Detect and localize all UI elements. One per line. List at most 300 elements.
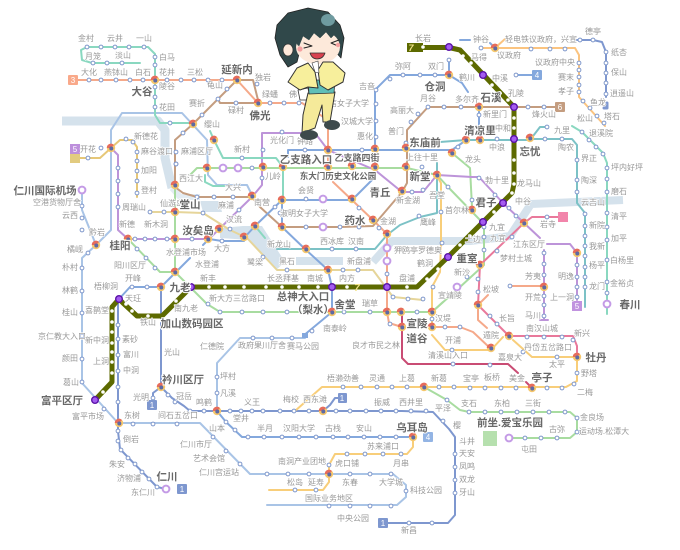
station labels: regular: 斗井 <box>459 436 475 446</box>
station labels: regular: 燕钵山 <box>104 67 128 77</box>
station labels: regular: 孝子 <box>558 87 574 96</box>
station labels: regular: 大兴 <box>225 182 241 192</box>
station labels: regular: 梧濑劲善 <box>327 373 359 383</box>
station labels: regular: 松岛 <box>287 477 303 487</box>
station labels: regular: 倒岩 <box>123 434 139 444</box>
light blue lines <box>82 113 406 505</box>
white hand <box>298 88 310 100</box>
station labels: regular: 磨石 <box>611 186 627 196</box>
station labels: regular: 议政府中央 <box>535 57 575 67</box>
station labels: regular: 开浦 <box>445 335 461 345</box>
station labels: regular: 屯田 <box>521 444 537 454</box>
station labels: regular: 新丰 <box>200 273 216 283</box>
station labels: regular: 光明 <box>133 392 149 402</box>
station labels: regular: 南营 <box>254 197 270 207</box>
station labels: regular: 汉南 <box>348 236 364 246</box>
station labels: regular: 中溪 <box>492 73 508 83</box>
station labels: regular: 龙门 <box>589 281 605 291</box>
station labels: regular: 长丞拜基 <box>267 273 299 283</box>
station labels: major stations: 君子 <box>476 197 497 209</box>
station labels: regular: 桂山 <box>62 307 78 317</box>
station labels: regular: 空港货物厅舍 <box>33 197 81 207</box>
station labels: regular: 宣靖陵 <box>438 290 462 300</box>
station labels: regular: 麻谷渡口 <box>141 146 173 156</box>
station labels: major stations: （梨水） <box>292 303 334 316</box>
station labels: regular: 喜鹊堂 <box>85 305 109 315</box>
river <box>62 121 623 270</box>
line 5: lilac <box>111 133 577 320</box>
station labels: regular: 古栈 <box>325 423 341 433</box>
station labels: regular: 新大方三岔路口 <box>209 293 265 303</box>
station labels: regular: 花田 <box>159 102 175 112</box>
station labels: regular: 白石 <box>135 67 151 77</box>
station labels: regular: 大化 <box>81 67 97 77</box>
station labels: regular: 长旨 <box>499 313 515 323</box>
station labels: regular: 野塔 <box>581 368 597 378</box>
station labels: regular: 新德花 <box>134 131 158 141</box>
station labels: regular: 东柏 <box>494 398 510 408</box>
station labels: regular: 凤鸣 <box>459 461 475 471</box>
station labels: regular: 清溪山入口 <box>428 350 468 360</box>
station labels: regular: 中洞 <box>123 365 139 375</box>
station labels: regular: 鹭梁 <box>247 257 263 267</box>
station labels: major stations: 东大门历史文化公园 <box>300 171 376 181</box>
legs <box>300 92 340 140</box>
station labels: major stations <box>14 63 640 483</box>
station labels: major stations: 忘忧 <box>520 145 541 158</box>
station labels: major stations: 延新内 <box>221 63 253 76</box>
station labels: regular: 淑明女子大学 <box>280 208 328 218</box>
station labels: major stations: 亭子 <box>532 371 553 384</box>
teal robe <box>308 80 335 94</box>
station labels: regular: 花井 <box>159 67 175 77</box>
station labels: regular: 济物浦 <box>117 473 141 483</box>
station labels: major stations: 宣陵 <box>406 317 428 330</box>
station labels: regular: 南洞产业团地 <box>278 456 326 466</box>
station labels: regular: 普门 <box>388 126 404 136</box>
station labels: regular: 堂井 <box>233 413 249 423</box>
line boxes: 7 <box>354 283 360 294</box>
station labels: regular: 南城 <box>307 273 323 283</box>
yellow lines <box>80 39 605 490</box>
station labels: regular: 儿岭 <box>265 171 281 181</box>
station labels: regular: 松山 <box>577 113 593 123</box>
line boxes: 4 <box>426 433 431 442</box>
station labels: major stations: 石溪 <box>480 91 502 104</box>
station labels: regular: 西东滩 <box>303 394 327 404</box>
station labels: regular: 新中洞 <box>85 335 109 345</box>
station labels: regular: 德亭 <box>585 26 601 36</box>
station labels: regular: 樱 <box>453 420 461 430</box>
station labels: regular: 水登浦 <box>195 259 219 269</box>
station labels: regular: 京仁教大入口 <box>38 331 86 341</box>
station labels: regular: 首尔林 <box>445 205 469 215</box>
station labels: major stations: 乙支路四街 <box>334 152 380 163</box>
line boxes <box>68 43 582 528</box>
station labels: regular: 麻浦区厅 <box>181 146 213 156</box>
station labels: regular: 宝亭 <box>463 373 479 383</box>
station labels: regular: 平泽 <box>435 404 451 413</box>
station labels: major stations: 药水 <box>344 214 366 227</box>
station labels: regular: 东春 <box>342 477 358 487</box>
station labels: regular: 吾堂 <box>429 190 445 200</box>
station labels: regular: 半月 <box>257 423 273 433</box>
station labels: regular: 丹岱五岔路口 <box>524 342 572 352</box>
station labels: regular: 仁川宫运站 <box>199 467 239 477</box>
line boxes: 5 <box>73 145 78 154</box>
station labels: regular: 登村 <box>141 185 157 195</box>
station labels: regular: 义王 <box>244 398 260 407</box>
station labels: regular: 大方 <box>214 243 230 253</box>
station labels: major stations: 总神大入口 <box>277 290 329 303</box>
station labels: regular: 鹤川 <box>459 72 475 82</box>
station labels: regular: 内方 <box>339 273 355 283</box>
station labels: major stations: 加山数码园区 <box>160 317 224 330</box>
station labels: major stations: 堂山 <box>180 198 200 211</box>
station labels: regular: 铁山 <box>140 317 156 327</box>
station labels: regular: 葛山 <box>63 377 79 387</box>
station labels: regular: 苏来浦口 <box>367 441 399 451</box>
station labels: major stations: 桂阳 <box>110 239 130 252</box>
station labels: major stations: 富平区厅 <box>41 394 83 407</box>
station labels: regular: 仁德院 <box>200 341 224 351</box>
station labels: regular: 坪内好坪 <box>611 162 643 172</box>
station labels: regular: 加平 <box>611 233 627 243</box>
station labels: regular: 仁川市厅 <box>180 439 212 449</box>
station labels: regular: 鹤洞 <box>417 258 433 268</box>
station labels: regular: 保山 <box>611 67 627 77</box>
line boxes: 1 <box>150 401 155 410</box>
station labels: regular: 东树 <box>124 410 140 420</box>
line 6: brown <box>175 80 560 227</box>
station labels: regular: 冠岳 <box>176 391 192 401</box>
fringe <box>295 24 342 46</box>
station labels: major stations: 衿川区厅 <box>162 373 204 386</box>
mint and teal lines <box>81 47 607 314</box>
station labels: regular: 富平市场 <box>72 411 104 421</box>
station labels: regular: 陶农 <box>558 142 574 152</box>
station labels: regular: 梧柳洞 <box>94 281 118 291</box>
line boxes: 1 <box>180 485 185 494</box>
station labels: regular: 西井里 <box>399 397 423 407</box>
station labels: regular: 中浪 <box>489 142 505 152</box>
station labels: regular: 淡山 <box>115 50 131 60</box>
station labels: regular: 议政府 <box>497 50 521 60</box>
station labels: regular: 振威 <box>374 397 390 407</box>
station labels: regular: 退溪院 <box>589 128 613 138</box>
station labels: major stations: 佛光 <box>250 109 271 122</box>
station labels: major stations: 前坐.爱宝乐园 <box>477 416 543 429</box>
station labels: regular: 鱼龙 <box>590 97 606 107</box>
station labels: regular: 上往十里 <box>406 152 438 162</box>
line 7: olive <box>95 48 514 400</box>
station labels: regular: 虎口铺 <box>335 458 359 468</box>
line 2: green <box>128 153 577 438</box>
station labels: regular: 美金 <box>509 373 525 383</box>
line boxes: 1 <box>340 394 345 403</box>
station labels: regular: 光化门 <box>270 135 294 145</box>
station labels: regular: 汉城大学 <box>341 116 373 126</box>
station labels: regular: 三松 <box>187 67 203 77</box>
station labels: regular: 多尔齐 <box>455 94 479 104</box>
transfer stations <box>92 44 581 478</box>
station labels: regular: 鹰峰 <box>420 217 436 227</box>
station labels: regular: 艺术会馆 <box>193 453 225 463</box>
station labels: regular: 烽火山 <box>532 109 556 119</box>
station labels: regular: 素砂 <box>122 334 138 344</box>
pink and crimson lines <box>402 217 577 388</box>
line boxes: 3 <box>71 76 76 85</box>
station labels: regular: 逍遥山 <box>610 88 634 98</box>
station labels: major stations: 仓洞 <box>424 80 446 93</box>
station labels: regular: 支石 <box>461 398 477 408</box>
line 3: orange <box>73 80 544 348</box>
station labels: regular: 杨平 <box>589 260 605 270</box>
station labels: regular: 金裕贞 <box>610 278 634 288</box>
station labels: regular: 汉流 <box>226 214 242 224</box>
station labels: regular: 赛末 <box>558 72 574 82</box>
station labels: regular: 鸣鹤 <box>196 397 212 407</box>
stations <box>80 38 609 525</box>
station labels: regular: 汉阳大学 <box>283 423 315 433</box>
station labels: regular: 仙游岛 <box>160 198 184 208</box>
station labels: regular: 岩寺 <box>540 219 556 229</box>
station labels: regular: 一山 <box>136 33 152 43</box>
station labels: regular: 上洞 <box>93 356 109 366</box>
line boxes: 5 <box>575 302 580 311</box>
station labels: regular: 新木洞 <box>144 219 168 229</box>
station labels: major stations: 道谷 <box>406 332 428 345</box>
station labels: regular: 佛 <box>289 89 297 99</box>
station labels: regular: 东仁川 <box>131 487 155 497</box>
station labels: regular: 开荒 <box>525 292 541 302</box>
station labels: regular: 惠化 <box>357 131 373 141</box>
station labels: regular: 赛折 <box>189 98 205 108</box>
station labels: regular: 橘岘 <box>67 244 83 254</box>
station labels: regular: 九宜 <box>489 222 505 232</box>
station labels: regular: 月串 <box>393 459 409 468</box>
station labels: regular: 吉音 <box>359 81 375 91</box>
station labels: major stations: 乙支路入口 <box>280 153 332 166</box>
station labels: regular: 黑石 <box>279 257 295 266</box>
station labels: regular: 古弥 <box>549 424 565 434</box>
station labels: regular: 太平 <box>549 359 565 369</box>
station labels: regular: 盘浦 <box>399 273 415 283</box>
station labels: major stations: 青丘 <box>370 186 391 199</box>
station labels: regular: 土边 <box>465 234 481 244</box>
station labels: regular: 光山 <box>164 347 180 357</box>
station labels: regular: 双门 <box>428 61 444 71</box>
station labels: regular: 弥阿 <box>395 61 411 71</box>
station labels: regular: 龟山 <box>207 80 223 90</box>
station labels: regular: 新院 <box>589 220 605 230</box>
station labels: regular: 朴村 <box>62 262 78 272</box>
station labels: regular: 马川 <box>525 311 541 320</box>
station labels: regular: 芳夷 <box>525 271 541 281</box>
station labels: regular: 新德 <box>119 219 135 229</box>
station labels: regular: 双龙 <box>459 474 475 484</box>
station labels: major stations: 新堂 <box>410 170 430 183</box>
station labels: regular: 山本 <box>209 423 225 433</box>
station labels: regular: 明逸 <box>558 271 574 281</box>
station labels: regular: 朱安 <box>109 459 125 469</box>
station labels: regular: 国际业务地区 <box>305 493 353 503</box>
station labels: regular: 上一洞 <box>550 292 574 302</box>
station labels: regular: 云西 <box>62 211 78 220</box>
station labels: regular: 塔石 <box>604 111 620 121</box>
station labels: regular: 上葛 <box>399 373 415 383</box>
station labels: regular: 新村 <box>234 144 250 154</box>
station labels: major stations: 东庙前 <box>409 136 441 149</box>
station labels: regular: 良才市民之林 <box>352 340 400 350</box>
station labels: regular: 孔陵 <box>508 89 524 98</box>
station labels: regular: 轻电铁议政府，兴宣 <box>505 34 577 44</box>
station labels: regular: 坪村 <box>220 371 236 381</box>
station labels: regular: 周瑞山 <box>122 202 146 212</box>
station labels: regular: 林鹤 <box>62 285 78 295</box>
station labels: regular: 松坡 <box>483 284 499 294</box>
station labels: regular: 龙马山 <box>517 178 541 188</box>
station labels: regular: 新龙山 <box>267 239 291 249</box>
station labels: regular: 月笼 <box>85 51 101 61</box>
station labels: regular: 二梅 <box>577 387 593 397</box>
station labels: regular: 钟路 <box>297 136 313 146</box>
station labels: regular: 天安 <box>459 448 475 458</box>
line boxes: 7 <box>408 43 414 53</box>
line 7 station dots <box>101 45 516 394</box>
station labels: regular: 云吉山 <box>581 197 605 207</box>
hair back <box>275 8 344 67</box>
station labels: regular: 江东区厅 <box>513 239 545 249</box>
line boxes: 4 <box>535 71 540 80</box>
station labels: regular: 西冰库 <box>320 236 344 246</box>
station labels: regular: 独岩 <box>255 72 271 82</box>
station labels: major stations: 春川 <box>620 298 640 311</box>
station labels: regular: 黔岩 <box>89 227 105 237</box>
station labels: regular: 凡溪 <box>220 388 236 398</box>
station labels: regular: 会贤 <box>298 185 314 195</box>
station labels: regular: 缨山 <box>204 119 220 129</box>
station labels: regular: 高丽大 <box>390 105 414 115</box>
station labels: regular: 新盘浦 <box>347 256 371 266</box>
station labels: regular: 新葛 <box>431 373 447 383</box>
station labels: regular: 大学城 <box>379 477 403 487</box>
station labels: regular: 九里 <box>554 126 570 135</box>
station labels: regular: 颜田 <box>62 353 78 363</box>
station labels: regular: 九宜 <box>490 233 506 243</box>
station labels: regular: 纸杏 <box>611 47 627 57</box>
station labels: regular: 新兴 <box>574 328 590 338</box>
station labels: regular: 板桥 <box>484 372 500 382</box>
jacket sleeves <box>288 61 345 90</box>
line 1: main south-west branch <box>118 40 607 523</box>
station labels: regular: 金良场 <box>580 412 604 422</box>
station labels: regular: 狎鸥亭罗德奥 <box>394 245 442 255</box>
line boxes: 1 <box>381 519 386 528</box>
station labels: major stations: 舍堂 <box>334 298 356 311</box>
station labels: regular: 诚信女子大学 <box>321 98 369 108</box>
station labels: regular: 西江大 <box>179 173 203 183</box>
station labels: regular: 云井 <box>107 33 123 43</box>
face <box>296 30 340 64</box>
station labels: regular: 梦村土城 <box>500 253 532 263</box>
station labels: regular: 麻浦 <box>218 200 234 210</box>
station labels: regular: 水登浦市场 <box>166 247 206 257</box>
lilac ring stations <box>79 165 610 492</box>
station labels: regular: 安山 <box>356 423 372 433</box>
station labels: regular: 新金湖 <box>396 195 420 205</box>
station labels: regular: 中央公园 <box>337 513 369 523</box>
station labels: regular: 阳川区厅 <box>114 261 146 270</box>
station labels: regular: 龙头 <box>465 154 481 164</box>
station labels: regular: 陵谷 <box>159 82 175 91</box>
character: cartoon boy in yellow hanbok <box>275 8 345 140</box>
station labels: regular: 陶深 <box>581 175 597 185</box>
station labels: regular: 富川 <box>123 349 139 359</box>
station labels: major stations: 汝矣岛 <box>182 224 214 237</box>
station labels: major stations: 清凉里 <box>464 124 496 137</box>
station labels: major stations: 仁川 <box>156 470 178 483</box>
station labels: major stations: 重室 <box>456 252 478 265</box>
station labels: regular: 三街 <box>525 398 541 408</box>
station labels: regular: 新沙 <box>454 267 470 277</box>
line 4: blue <box>119 40 537 437</box>
station labels: regular: 绿蟠 <box>262 89 278 99</box>
station labels: regular: 白杨里 <box>610 255 634 265</box>
station labels: regular: 梅校 <box>283 394 299 404</box>
station labels: regular: 清平 <box>611 211 627 221</box>
station labels: major stations: 乌耳岛 <box>396 421 428 434</box>
station labels: regular: 运动场.松潭大 <box>579 426 629 436</box>
station labels: regular: 政府果川厅舍 <box>238 340 286 350</box>
station labels: regular: 延寿 <box>308 477 324 487</box>
station labels: regular: 中和 <box>495 123 511 133</box>
station labels: regular: 汉堤 <box>435 313 451 323</box>
purple line 7 transfer stations <box>92 44 517 403</box>
station labels: major stations: 牡丹 <box>586 352 606 364</box>
station labels: regular: 南汉山城 <box>526 323 558 333</box>
station labels: regular: 新里门 <box>483 109 507 119</box>
station labels: regular: 南泰岭 <box>323 323 347 333</box>
station labels: major stations: 大谷 <box>132 85 153 98</box>
station labels: regular: 瑞草 <box>362 298 378 308</box>
station labels: regular: 天玨 <box>125 294 141 303</box>
station labels: regular: 开峰 <box>125 273 141 283</box>
station labels: regular: 赛马公园 <box>287 341 319 351</box>
station labels: regular: 科技公园 <box>410 485 442 495</box>
station labels: regular: 新昌 <box>401 525 417 535</box>
line boxes: 6 <box>558 103 563 112</box>
station labels: regular: 界正 <box>581 154 597 163</box>
station labels: regular: 开花 <box>80 144 96 154</box>
station labels: regular: 灵通 <box>369 373 385 383</box>
station labels: regular: 长岩 <box>415 33 431 43</box>
station labels: regular: 我新 <box>589 241 605 251</box>
station labels: regular: 勃十里 <box>485 175 509 185</box>
station labels: regular: 月谷 <box>420 94 436 103</box>
station labels: regular: 间石五岔口 <box>158 410 198 420</box>
station labels: regular: 南九老 <box>174 303 198 313</box>
station labels: regular: 牙山 <box>459 487 475 497</box>
station labels: regular: 金村 <box>78 33 94 43</box>
station labels: regular: 碌村 <box>228 105 244 115</box>
station labels: regular: 遁院 <box>483 330 499 340</box>
station labels: regular: 钟谷 <box>473 34 489 44</box>
station labels: regular: 加阳 <box>141 165 157 175</box>
station labels: regular: 金湖 <box>380 216 396 226</box>
station labels: regular: 马得 <box>471 52 487 62</box>
station labels: regular: 嘉泉大 <box>498 352 522 362</box>
